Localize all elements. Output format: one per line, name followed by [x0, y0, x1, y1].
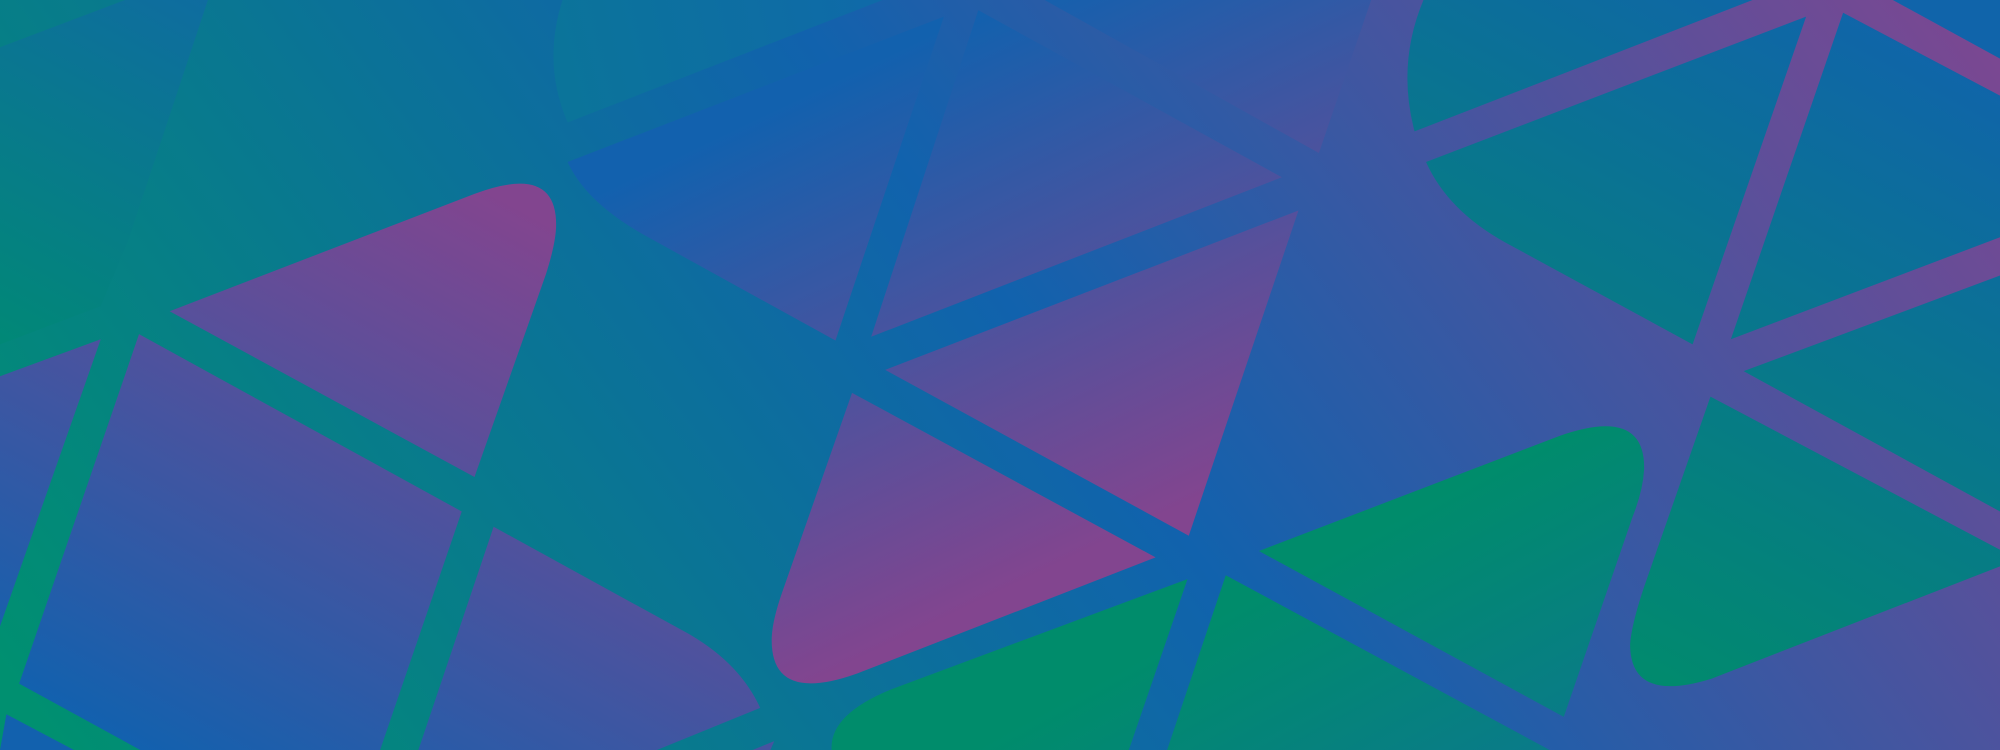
- shape: green rounded triangle: [1259, 426, 1644, 717]
- shape: purple rounded triangle upper left: [170, 184, 556, 477]
- shape: blue rounded triangle top centre: [568, 17, 944, 341]
- shape: teal triangle right edge: [1744, 276, 2000, 511]
- shape: left edge triangle: [0, 339, 101, 626]
- shape: faint top left quad: [0, 0, 208, 344]
- shape: teal rounded triangle upper right: [1426, 17, 1806, 344]
- shape: teal top rounded shape: [1407, 0, 1753, 131]
- shape: teal quad upper right: [1731, 13, 2000, 339]
- shape: green triangle bottom centre: [832, 579, 1188, 750]
- shape: large quad lower left: [19, 334, 462, 750]
- shape: top quad: [1045, 0, 1371, 153]
- shape: small sliver bottom: [753, 741, 774, 750]
- shape: small corner triangle bottom left: [0, 714, 74, 750]
- shape: green rounded triangle right: [1630, 397, 2000, 686]
- shape: green triangle bottom centre right: [1167, 575, 1550, 750]
- shape: lower middle rounded quad: [418, 527, 760, 750]
- shape: faint top centre rounded triangle: [553, 0, 883, 122]
- shape: purple triangle centre right: [885, 210, 1298, 536]
- shape: blue triangle top centre right: [871, 10, 1282, 337]
- shape: purple rounded triangle centre: [772, 393, 1156, 683]
- shape: blue top right corner: [1893, 0, 2000, 59]
